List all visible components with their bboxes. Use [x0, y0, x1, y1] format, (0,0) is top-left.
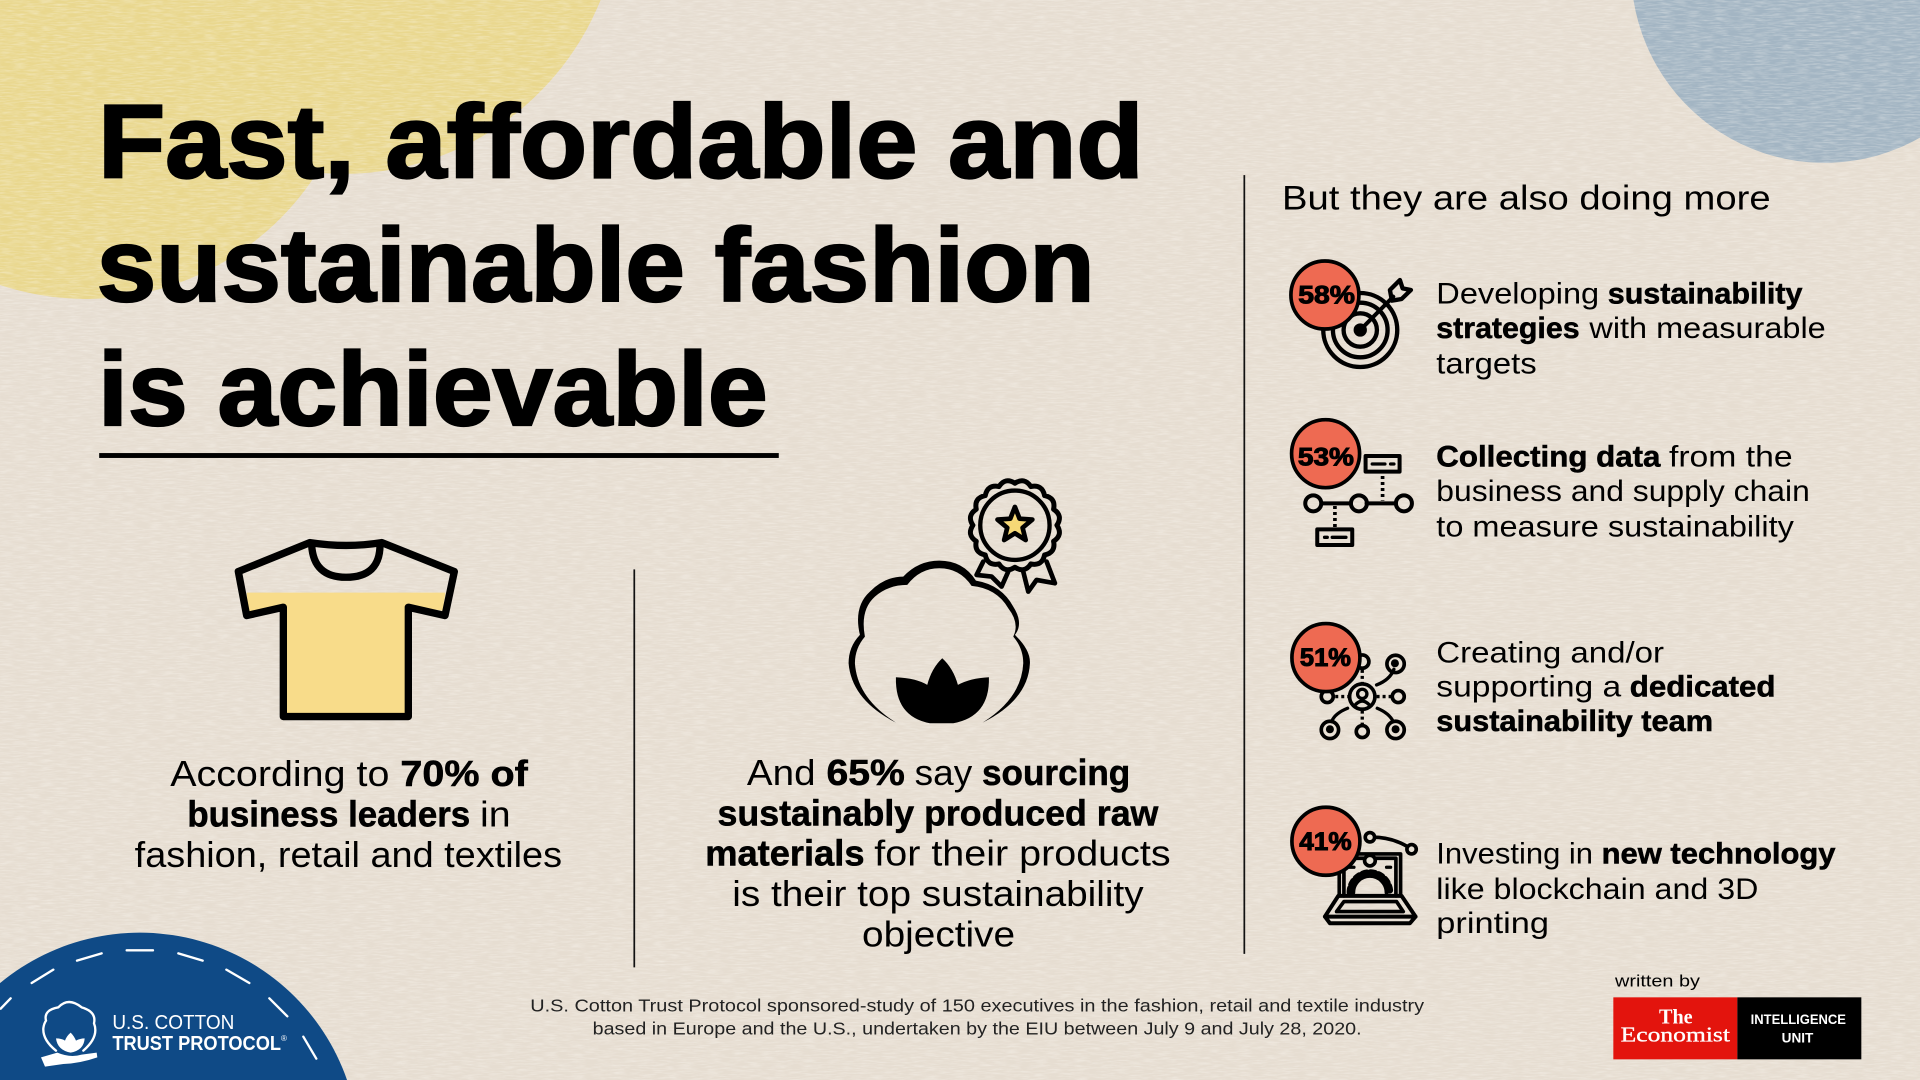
icon: data flow with 53% badge	[1292, 420, 1412, 545]
text: 41% new technology: Investing in	[1436, 837, 1593, 870]
icon: t-shirt	[238, 543, 454, 717]
text: 53% collecting data: to measure sustainability	[1436, 510, 1794, 543]
text: 70% of business leaders: 70% of	[400, 753, 529, 794]
logo: written by The Economist Intelligence Unit	[1613, 972, 1861, 1059]
text: 65% sourcing raw materials: materials	[705, 833, 864, 874]
icon: data flow with 53% badge: 53%	[1298, 443, 1354, 471]
text: 51% dedicated team: Creating and/or	[1436, 636, 1664, 669]
text: 51% dedicated team: supporting a	[1436, 671, 1622, 704]
title	[97, 85, 1144, 448]
icon: technology laptop with 41% badge	[1292, 807, 1416, 923]
text: 53% collecting data: business and supply chain	[1436, 475, 1810, 508]
text: 51% dedicated team: dedicated	[1630, 671, 1776, 704]
text: 65% sourcing raw materials: say	[915, 752, 972, 793]
text: 70% of business leaders: According to	[170, 753, 389, 794]
text: 70% of business leaders: business leaders	[187, 794, 470, 835]
text: 53% collecting data: from the	[1669, 441, 1793, 474]
text: 65% sourcing raw materials: objective	[862, 914, 1015, 955]
text: 58% sustainability strategies: targets	[1436, 347, 1537, 380]
text: 58% sustainability strategies: with measurable	[1588, 312, 1826, 345]
text: 53% collecting data	[1436, 441, 1810, 543]
text: 65% sourcing raw materials: sourcing	[982, 752, 1130, 793]
icon: team network with 51% badge	[1292, 624, 1404, 739]
text: 65% sourcing raw materials	[705, 752, 1171, 955]
text: 65% sourcing raw materials: And	[747, 752, 816, 793]
logo: written by The Economist Intelligence Unit: Economist	[1621, 1023, 1730, 1047]
text: 70% of business leaders	[135, 753, 562, 875]
icon: target with 58% badge	[1291, 261, 1411, 367]
text: 41% new technology: new technology	[1602, 837, 1836, 870]
text: 65% sourcing raw materials: sustainably produced raw	[718, 792, 1159, 833]
icon: team network with 51% badge: 51%	[1300, 644, 1351, 672]
text: 65% sourcing raw materials: 65%	[827, 752, 905, 793]
heading: but they are also doing more: But they are also doing more	[1282, 179, 1771, 217]
text: 51% dedicated team: sustainability team	[1436, 705, 1713, 738]
text: 51% dedicated team	[1436, 636, 1776, 738]
title: is achievable	[98, 332, 768, 448]
icon: technology laptop with 41% badge: 41%	[1299, 828, 1352, 856]
icon: target with 58% badge: 58%	[1298, 282, 1355, 310]
logo: written by The Economist Intelligence Unit: UNIT	[1782, 1030, 1814, 1046]
text: 41% new technology: like blockchain and 3D	[1436, 873, 1758, 906]
logo: written by The Economist Intelligence Unit: The	[1659, 1006, 1693, 1028]
background shape: blue circle	[1633, 0, 1920, 163]
text: 70% of business leaders: fashion, retail and textiles	[135, 834, 562, 875]
footnote: based in Europe and the U.S., undertaken by the EIU between July 9 and July 28, 2020.	[593, 1019, 1362, 1039]
panel: U.S. Cotton Trust Protocol logo badge	[0, 933, 347, 1080]
text: 65% sourcing raw materials: for their products	[874, 833, 1171, 874]
footnote: U.S. Cotton Trust Protocol sponsored-study of 150 executives in the fashion, retail and textile industry	[530, 995, 1424, 1015]
icon: cotton boll with award medal	[849, 481, 1059, 723]
text: 58% sustainability strategies: strategies	[1436, 312, 1580, 345]
text: 41% new technology: printing	[1436, 907, 1549, 940]
text: 53% collecting data: Collecting data	[1436, 441, 1661, 474]
footnote	[530, 995, 1424, 1039]
panel: U.S. Cotton Trust Protocol logo badge: U.S. COTTON	[112, 1011, 234, 1034]
title: Fast, affordable and	[98, 85, 1144, 201]
background shape: yellow blob	[0, 0, 601, 299]
panel: U.S. Cotton Trust Protocol logo badge: ®	[281, 1034, 287, 1043]
text: 58% sustainability strategies: Developing	[1436, 278, 1599, 311]
logo: written by The Economist Intelligence Unit: INTELLIGENCE	[1751, 1011, 1846, 1027]
text: 58% sustainability strategies: sustainability	[1608, 278, 1803, 311]
logo: written by The Economist Intelligence Unit: written by	[1614, 972, 1701, 991]
text: 41% new technology	[1436, 837, 1836, 940]
panel: U.S. Cotton Trust Protocol logo badge: TRUST PROTOCOL	[112, 1032, 281, 1055]
title underline	[99, 453, 779, 458]
title: sustainable fashion	[97, 208, 1095, 324]
text: 70% of business leaders: in	[480, 794, 511, 835]
text: 65% sourcing raw materials: is their top sustainability	[732, 873, 1144, 914]
text: 58% sustainability strategies	[1436, 278, 1826, 380]
